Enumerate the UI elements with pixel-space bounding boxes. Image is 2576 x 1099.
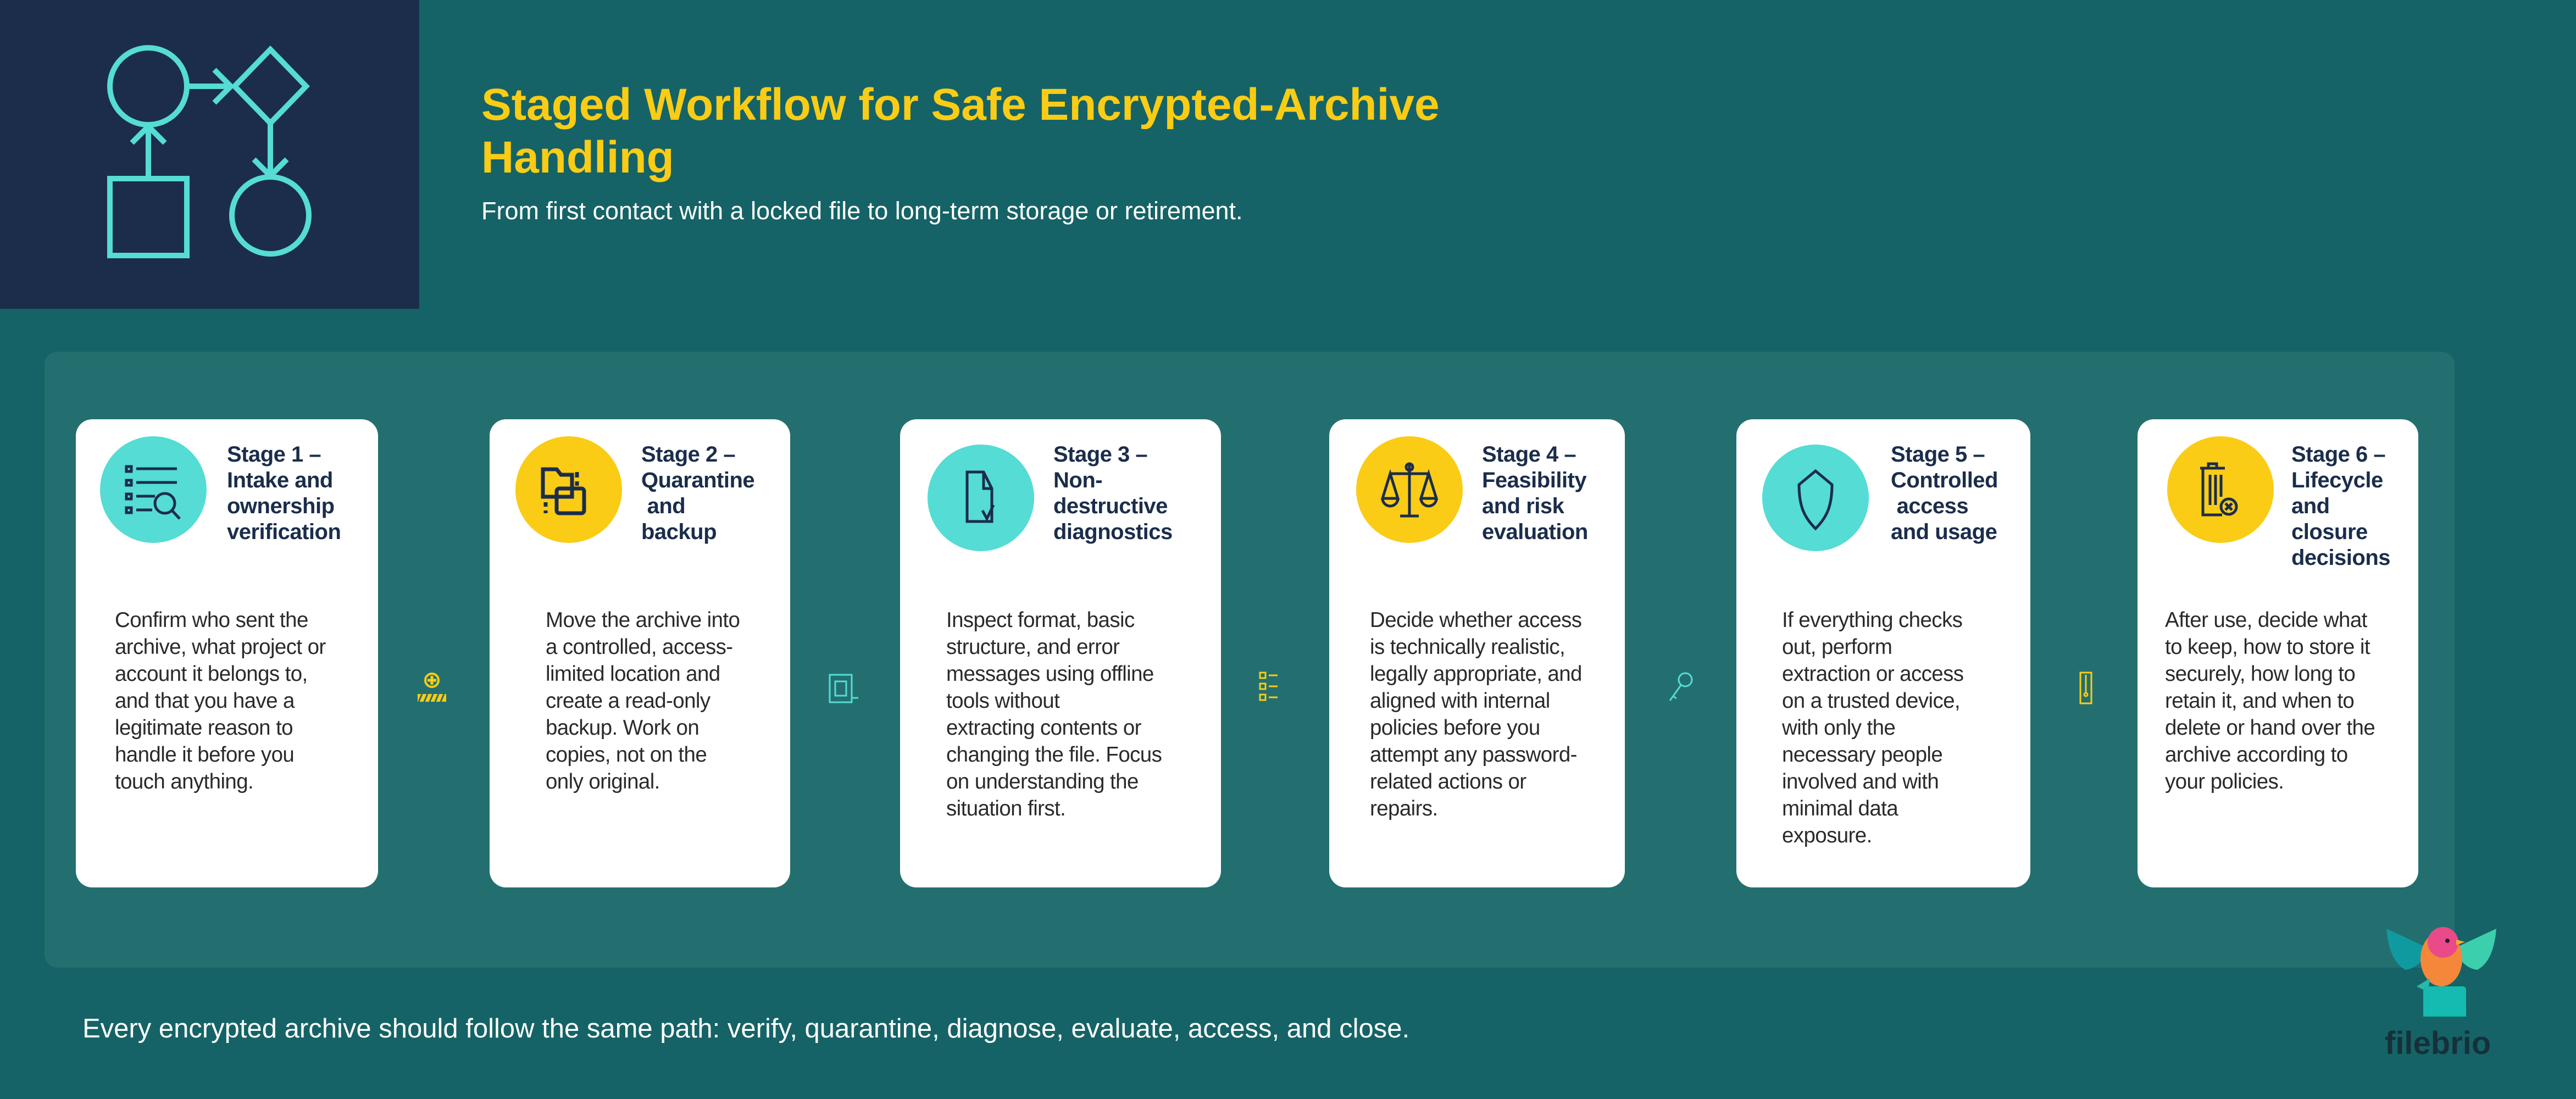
- body stage 2: [546, 608, 740, 793]
- body stage 1: handle it before you: [115, 743, 294, 767]
- heading stage 4: [1482, 442, 1588, 544]
- body stage 2: copies, not on the: [546, 743, 707, 767]
- card: stage 1: [76, 419, 378, 887]
- main panel: [45, 352, 2455, 968]
- card: stage 2: [490, 419, 790, 887]
- heading stage 6: [2291, 442, 2390, 570]
- body stage 1: touch anything.: [115, 770, 253, 793]
- heading stage 4: Stage 4 –: [1482, 442, 1576, 467]
- card: stage 3: [900, 419, 1221, 887]
- connector icon 2: [829, 674, 858, 703]
- title: Staged Workflow for Safe Encrypted-Archive: [481, 80, 1440, 130]
- heading stage 4: evaluation: [1482, 520, 1588, 544]
- body stage 4: aligned with internal: [1370, 689, 1550, 713]
- footer text: Every encrypted archive should follow the same path: verify, quarantine, diagnose, evaluate, access, and close.: [82, 1014, 1409, 1044]
- icon: folders: [515, 436, 622, 543]
- body stage 5: If everything checks: [1782, 608, 1962, 632]
- body stage 6: to keep, how to store it: [2165, 635, 2370, 659]
- heading stage 2: and: [647, 494, 685, 518]
- body stage 5: on a trusted device,: [1782, 689, 1960, 713]
- body stage 3: extracting contents or: [946, 716, 1141, 740]
- body stage 5: exposure.: [1782, 824, 1872, 847]
- body stage 4: is technically realistic,: [1370, 635, 1565, 659]
- body stage 4: repairs.: [1370, 797, 1438, 820]
- body stage 3: messages using offline: [946, 662, 1154, 686]
- heading stage 1: [227, 442, 341, 544]
- icon: shield: [1762, 445, 1869, 551]
- body stage 5: necessary people: [1782, 743, 1942, 767]
- heading stage 5: Controlled: [1891, 468, 1998, 492]
- body stage 3: structure, and error: [946, 635, 1119, 659]
- heading stage 4: Feasibility: [1482, 468, 1586, 492]
- body stage 1: [115, 608, 326, 793]
- heading stage 2: Quarantine: [641, 468, 754, 492]
- body stage 4: [1370, 608, 1582, 820]
- heading stage 3: Stage 3 –: [1053, 442, 1147, 467]
- heading stage 6: Lifecycle: [2291, 468, 2383, 492]
- body stage 1: and that you have a: [115, 689, 295, 713]
- connector icon 3: [1259, 671, 1278, 701]
- card: stage 4: [1329, 419, 1625, 887]
- body stage 6: retain it, and when to: [2165, 689, 2354, 713]
- title: [481, 80, 1440, 182]
- body stage 2: create a read-only: [546, 689, 710, 713]
- heading stage 5: and usage: [1891, 520, 1997, 544]
- logo: filebrio: [2385, 927, 2496, 1061]
- body stage 2: Move the archive into: [546, 608, 740, 632]
- heading stage 4: and risk: [1482, 494, 1564, 518]
- heading stage 1: Intake and: [227, 468, 333, 492]
- connector icon 4: [1669, 673, 1692, 701]
- connector icon 5: [2079, 671, 2092, 704]
- body stage 4: attempt any password-: [1370, 743, 1577, 767]
- heading stage 6: and: [2291, 494, 2330, 518]
- card: stage 6: [2138, 419, 2418, 887]
- body stage 1: archive, what project or: [115, 635, 326, 659]
- body stage 2: limited location and: [546, 662, 720, 686]
- body stage 2: backup. Work on: [546, 716, 699, 740]
- body stage 3: on understanding the: [946, 770, 1139, 793]
- body stage 3: tools without: [946, 689, 1059, 713]
- heading stage 6: decisions: [2291, 546, 2390, 570]
- heading stage 1: verification: [227, 520, 341, 544]
- body stage 5: out, perform: [1782, 635, 1892, 659]
- body stage 1: account it belongs to,: [115, 662, 308, 686]
- body stage 3: changing the file. Focus: [946, 743, 1162, 767]
- icon: scales: [1356, 436, 1463, 543]
- heading stage 2: [641, 442, 754, 544]
- body stage 6: After use, decide what: [2165, 608, 2367, 632]
- connector icon 1: [418, 673, 446, 702]
- body stage 6: [2165, 608, 2375, 793]
- header icon block: [0, 0, 419, 309]
- title: Handling: [481, 132, 674, 182]
- body stage 4: policies before you: [1370, 716, 1540, 740]
- body stage 6: delete or hand over the: [2165, 716, 2375, 740]
- body stage 4: related actions or: [1370, 770, 1526, 793]
- body stage 3: Inspect format, basic: [946, 608, 1135, 632]
- heading stage 5: [1891, 442, 1998, 544]
- heading stage 6: Stage 6 –: [2291, 442, 2385, 467]
- body stage 3: [946, 608, 1162, 820]
- subtitle: From first contact with a locked file to long-term storage or retirement.: [481, 197, 1243, 225]
- body stage 6: your policies.: [2165, 770, 2284, 793]
- logo: filebrio: filebrio: [2385, 1025, 2491, 1061]
- heading stage 1: ownership: [227, 494, 335, 518]
- heading stage 3: Non-: [1053, 468, 1102, 492]
- body stage 1: Confirm who sent the: [115, 608, 308, 632]
- heading stage 5: access: [1897, 494, 1968, 518]
- heading stage 2: backup: [641, 520, 717, 544]
- body stage 2: only original.: [546, 770, 660, 793]
- body stage 2: a controlled, access-: [546, 635, 732, 659]
- icon: document: [928, 445, 1034, 551]
- body stage 4: Decide whether access: [1370, 608, 1581, 632]
- body stage 3: situation first.: [946, 797, 1065, 820]
- body stage 6: securely, how long to: [2165, 662, 2355, 686]
- body stage 6: archive according to: [2165, 743, 2348, 767]
- body stage 5: [1782, 608, 1963, 847]
- body stage 5: involved and with: [1782, 770, 1939, 793]
- body stage 5: minimal data: [1782, 797, 1898, 820]
- heading stage 3: diagnostics: [1053, 520, 1173, 544]
- heading stage 5: Stage 5 –: [1891, 442, 1985, 467]
- body stage 4: legally appropriate, and: [1370, 662, 1582, 686]
- body stage 1: legitimate reason to: [115, 716, 293, 740]
- body stage 5: extraction or access: [1782, 662, 1963, 686]
- heading stage 1: Stage 1 –: [227, 442, 321, 467]
- heading stage 3: destructive: [1053, 494, 1168, 518]
- heading stage 3: [1053, 442, 1173, 544]
- card: stage 5: [1736, 419, 2030, 887]
- heading stage 2: Stage 2 –: [641, 442, 735, 467]
- heading stage 6: closure: [2291, 520, 2368, 544]
- icon: bin: [2167, 436, 2274, 543]
- icon: checklist search: [100, 436, 207, 543]
- body stage 5: with only the: [1782, 716, 1895, 740]
